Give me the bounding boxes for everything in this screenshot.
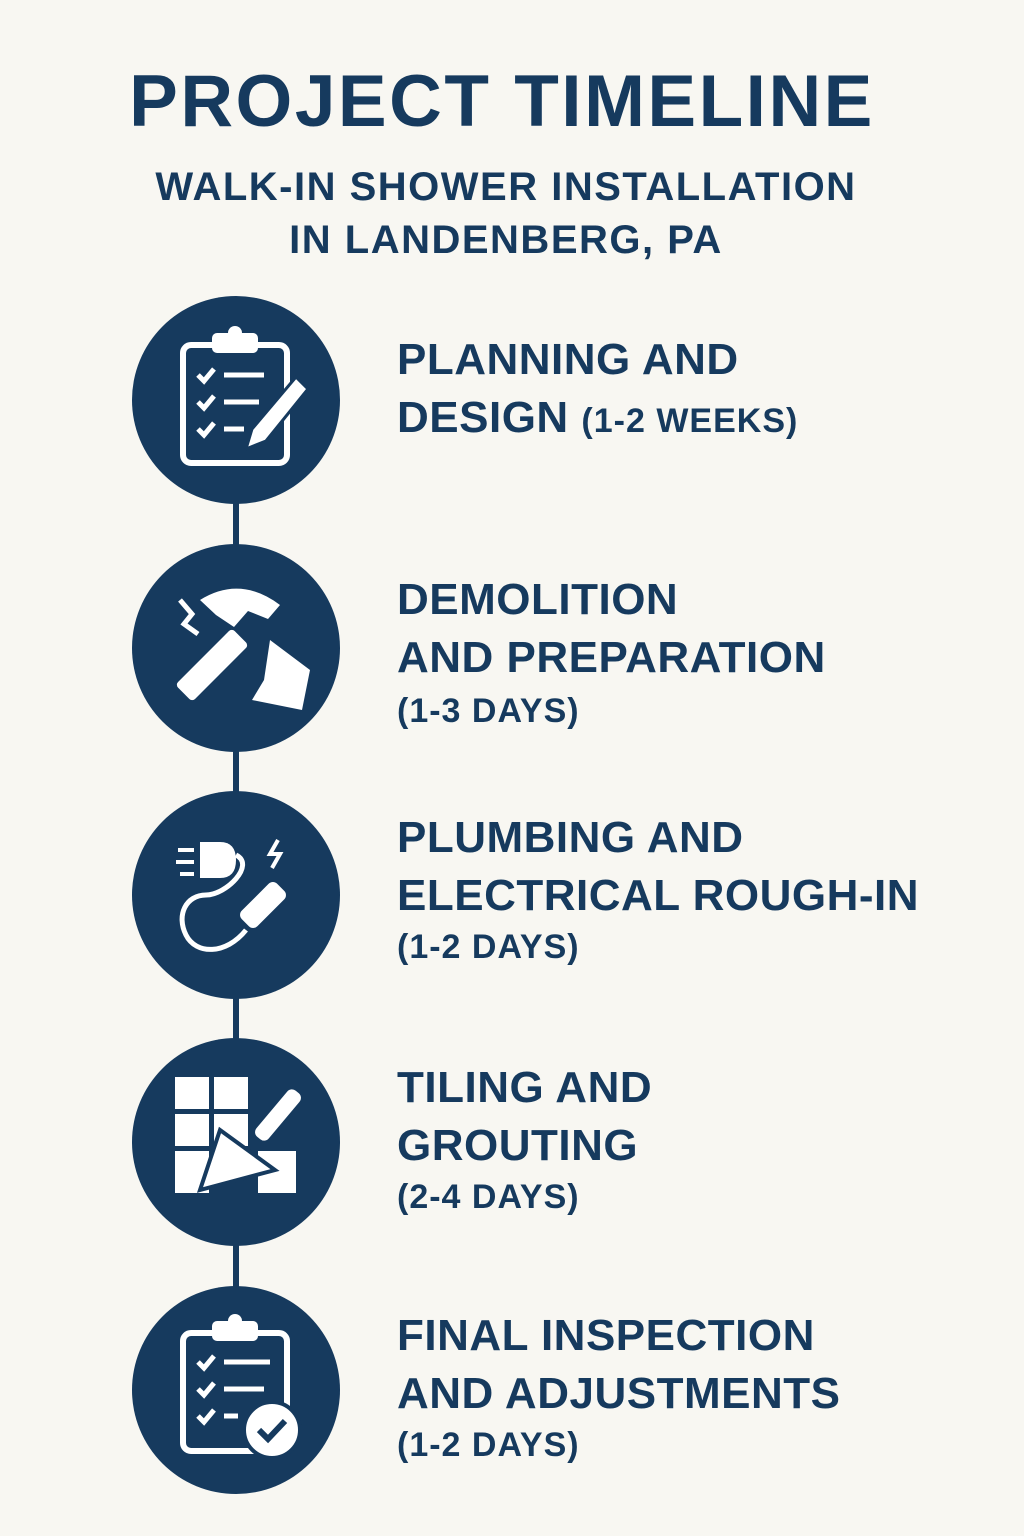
icon: plumbing electrical	[132, 791, 340, 999]
subtitle	[155, 165, 857, 262]
step 5 text	[397, 1311, 840, 1464]
step 2 text	[397, 575, 826, 730]
step 3 text: PLUMBING AND	[397, 813, 744, 862]
step 4 text: TILING AND	[397, 1063, 652, 1112]
title: PROJECT TIMELINE	[129, 61, 875, 142]
step 4 text: (2-4 DAYS)	[397, 1178, 580, 1216]
step 4 text: GROUTING	[397, 1121, 638, 1170]
step 1 text	[397, 335, 798, 442]
step 2 text: (1-3 DAYS)	[397, 692, 580, 730]
subtitle: WALK-IN SHOWER INSTALLATION	[155, 165, 857, 209]
step 1 text: DESIGN (1-2 WEEKS)	[397, 393, 798, 442]
icon: planning clipboard	[132, 296, 340, 504]
step 4 text	[397, 1063, 652, 1216]
step 3 text: ELECTRICAL ROUGH-IN	[397, 871, 919, 920]
step 1 text: PLANNING AND	[397, 335, 739, 384]
icon: tiling trowel	[132, 1038, 340, 1246]
step 2 text: DEMOLITION	[397, 575, 678, 624]
step 3 text: (1-2 DAYS)	[397, 928, 580, 966]
step 5 text: (1-2 DAYS)	[397, 1426, 580, 1464]
icon: final inspection	[132, 1286, 340, 1494]
step 5 text: FINAL INSPECTION	[397, 1311, 815, 1360]
icon: demolition hammer	[132, 544, 340, 752]
step 2 text: AND PREPARATION	[397, 633, 826, 682]
subtitle: IN LANDENBERG, PA	[289, 218, 723, 262]
step 5 text: AND ADJUSTMENTS	[397, 1369, 840, 1418]
step 3 text	[397, 813, 919, 966]
